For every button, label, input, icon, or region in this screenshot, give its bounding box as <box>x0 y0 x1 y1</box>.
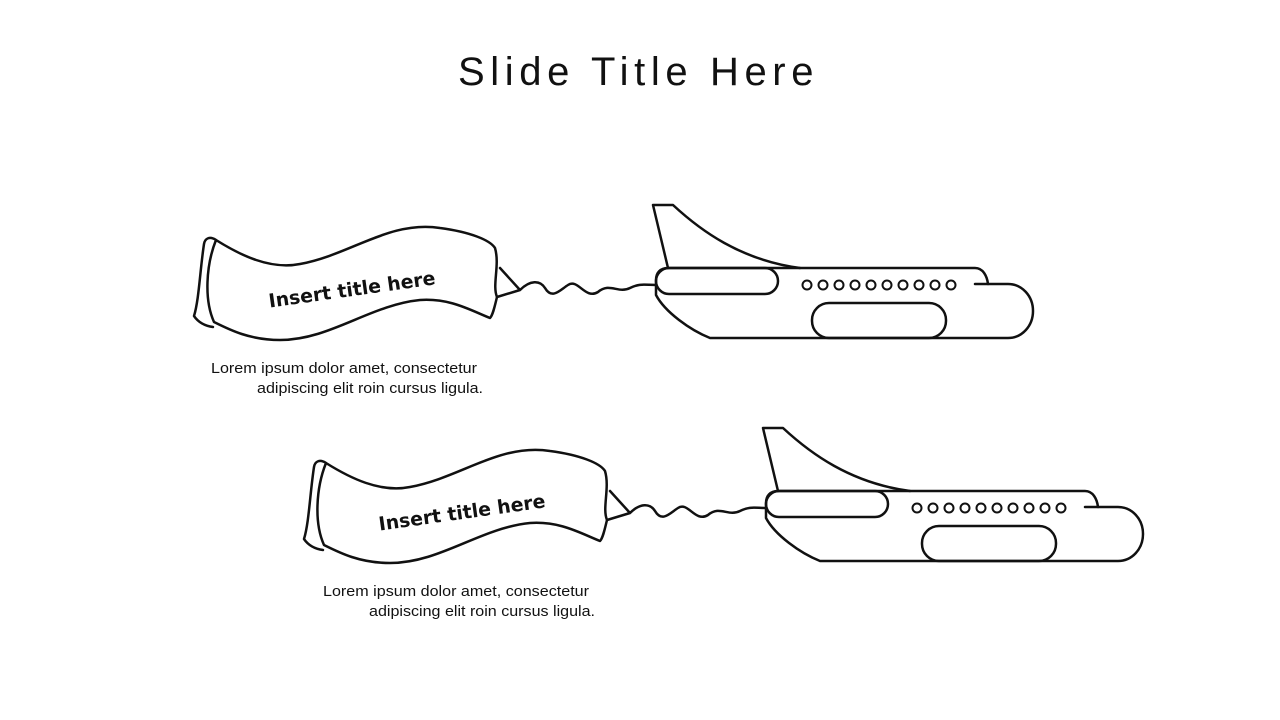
panel: row 1 <box>194 205 1033 340</box>
text: description 1: adipiscing elit roin cursus ligula. <box>257 381 483 397</box>
icon: rope 1 <box>497 268 656 297</box>
text: description 2: Lorem ipsum dolor amet, consectetur <box>323 584 589 600</box>
icon: banner 1 <box>194 227 497 340</box>
icon: plane 1 <box>653 205 1033 338</box>
text: banner title 2: Insert title here <box>377 490 547 536</box>
icon: plane 2 <box>763 428 1143 561</box>
panel: row 2 <box>304 428 1143 563</box>
icon: rope 2 <box>607 491 766 520</box>
title: Slide Title Here <box>458 50 818 94</box>
text: description 1: Lorem ipsum dolor amet, consectetur <box>211 361 477 377</box>
text: description 2: adipiscing elit roin cursus ligula. <box>369 604 595 620</box>
icon: banner 2 <box>304 450 607 563</box>
text: banner title 1: Insert title here <box>267 267 437 313</box>
